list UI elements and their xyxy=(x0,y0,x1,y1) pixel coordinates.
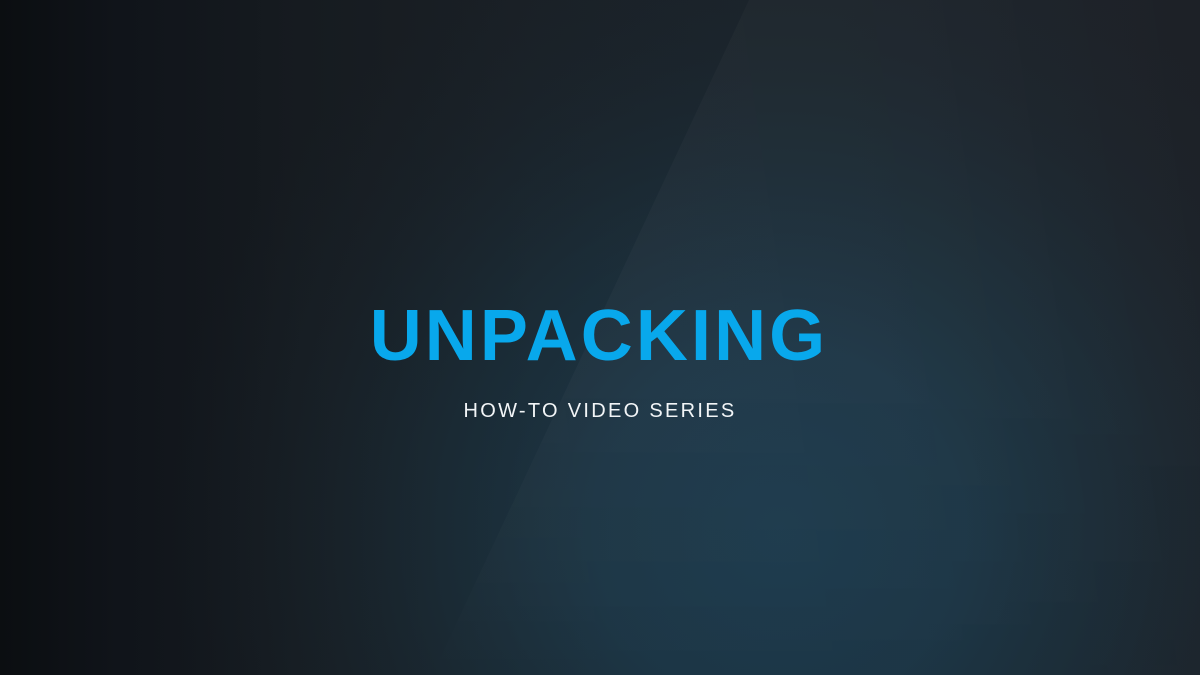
background: dark gradient with diagonal light panel xyxy=(340,36,1200,675)
subtitle: HOW-TO VIDEO SERIES xyxy=(464,400,736,422)
title: UNPACKING xyxy=(370,296,828,376)
